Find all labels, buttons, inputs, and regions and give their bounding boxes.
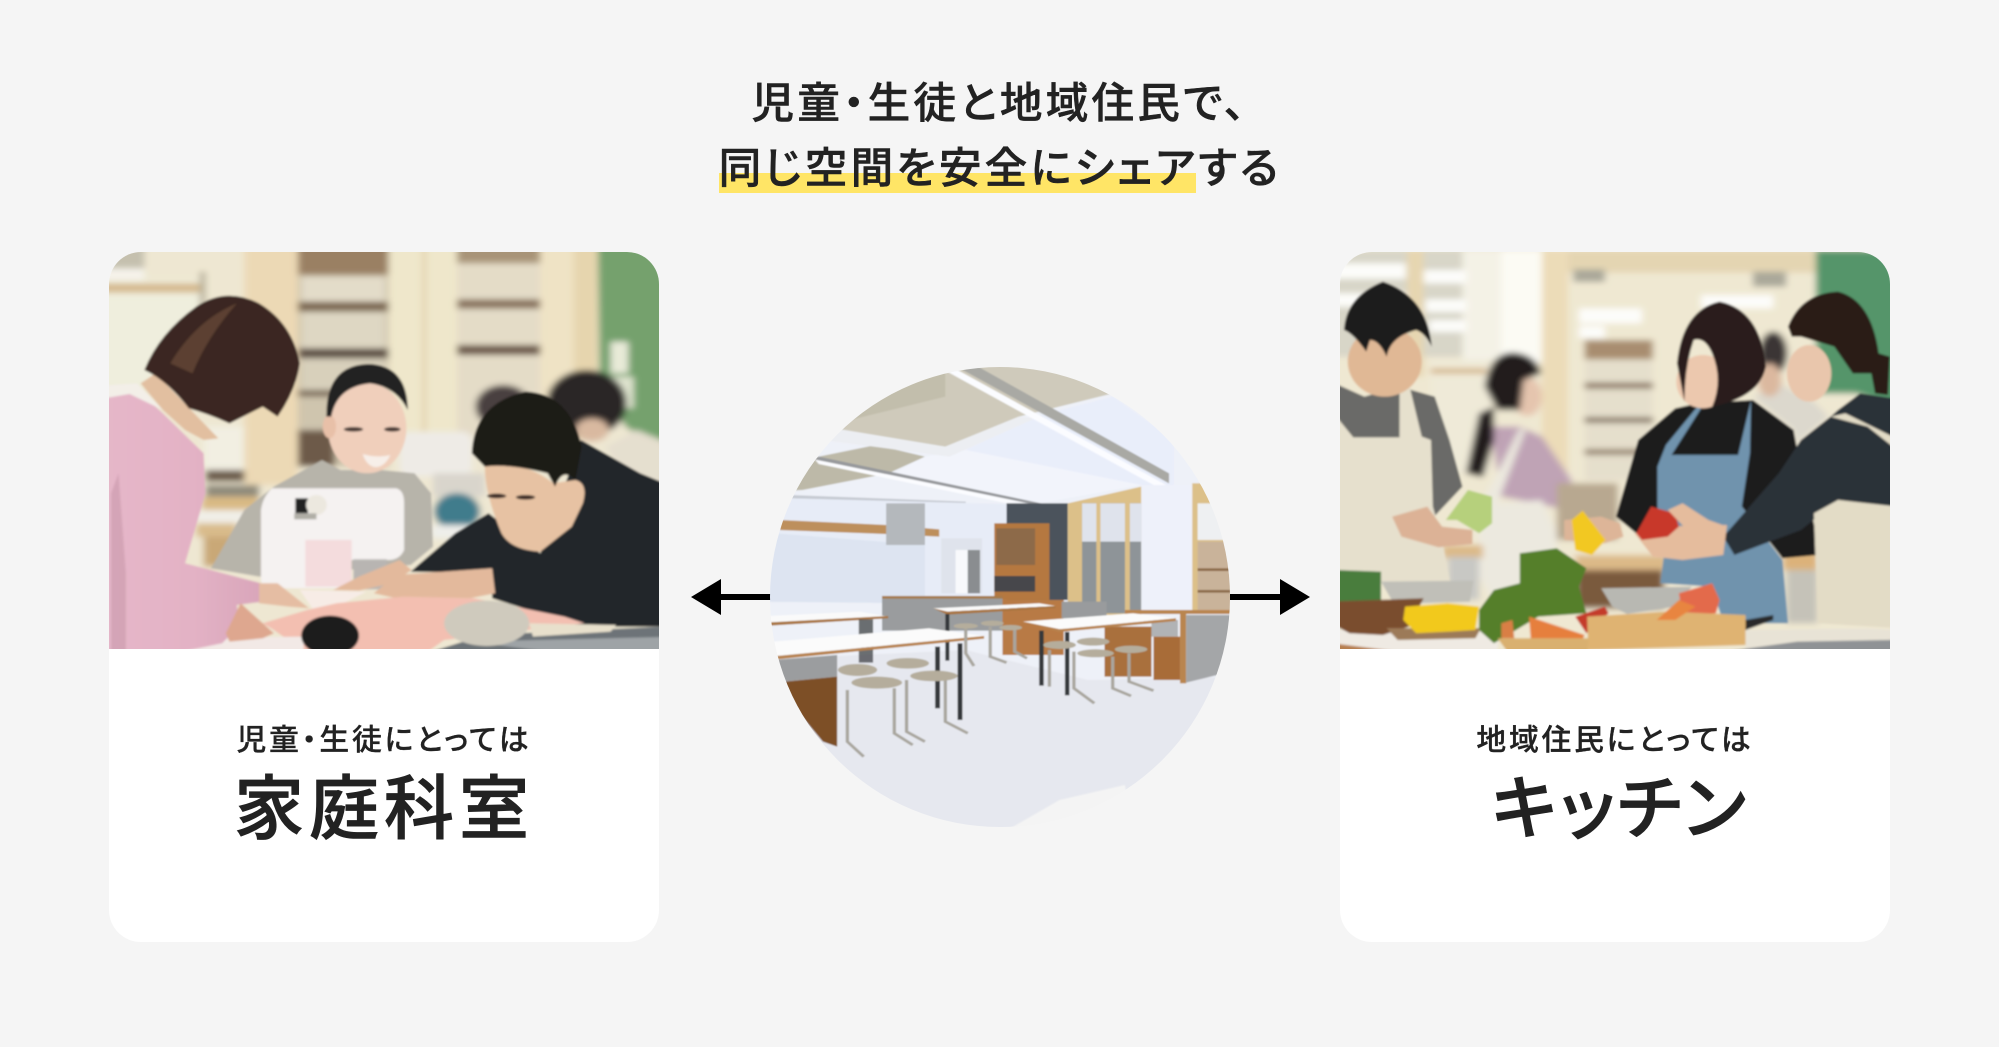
photo: classroom circle	[770, 367, 1230, 827]
top white edge of photo	[1340, 252, 1890, 255]
photo: sewing class	[109, 252, 659, 649]
library windows	[1068, 483, 1238, 615]
stools	[838, 621, 1154, 757]
foreground highlight	[990, 785, 1133, 840]
title line 1: 児童・生徒と地域住民で、	[752, 80, 1248, 128]
arrow: right	[1230, 579, 1310, 615]
card heading: 家庭科室	[234, 770, 534, 848]
woman in navy top	[1634, 292, 1927, 630]
blurred library background	[1305, 227, 1927, 673]
vegetables and bowls on table	[1320, 548, 1927, 653]
blurred library background	[85, 227, 707, 673]
arrow: left	[691, 579, 770, 615]
card heading: キッチン	[1492, 770, 1748, 848]
floor	[753, 650, 1251, 840]
card subtitle: 地域住民にとっては	[1476, 724, 1754, 757]
woman in pink cardigan	[85, 296, 309, 653]
man in apron	[1320, 282, 1492, 582]
panel: home economics room	[109, 252, 659, 942]
fabric and yarn on table	[170, 590, 677, 656]
title highlight	[719, 173, 1196, 193]
boy in black hoodie	[333, 392, 677, 627]
woman in blue apron	[1564, 302, 1818, 623]
smiling student	[211, 364, 433, 577]
sewing machine	[261, 488, 404, 589]
photo: cooking class	[1340, 252, 1890, 649]
back wall	[753, 497, 1068, 603]
ceiling	[762, 353, 1174, 510]
panel: kitchen	[1340, 252, 1890, 942]
title	[719, 80, 1281, 193]
title line 2: 同じ空間を安全にシェアする	[719, 145, 1281, 193]
counters	[882, 596, 1251, 683]
tables	[753, 603, 1176, 747]
card subtitle: 児童・生徒にとっては	[236, 724, 532, 757]
panel: central classroom	[691, 367, 1310, 827]
